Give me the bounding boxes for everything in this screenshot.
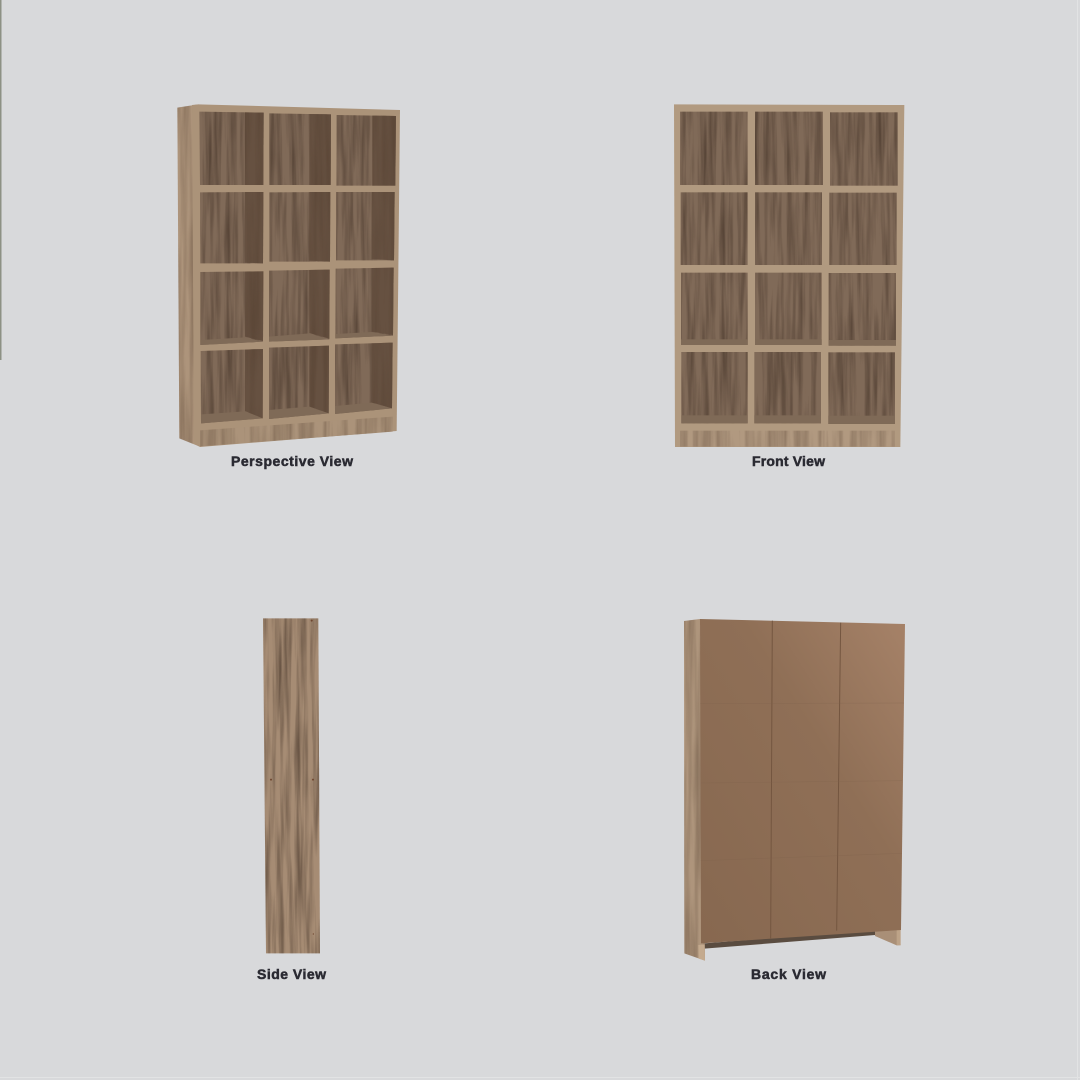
back view bookcase [684,619,905,961]
front frame [192,104,400,447]
cubby walls [199,112,396,423]
front view bookcase [674,104,904,447]
screw holes [270,620,314,935]
left edge strip [0,0,2,360]
cubby inner side walls [245,112,396,418]
side view label: Side View [257,966,326,982]
cubby walls [680,112,898,424]
outer frame [674,104,904,447]
back view label: Back View [751,966,826,982]
bottom edge line [0,1077,1080,1078]
panel grooves [771,621,841,938]
plinth [200,417,393,446]
cubby shelf floors [681,339,896,424]
front view label: Front View [752,453,825,469]
back board [700,619,905,943]
outer side panel [177,104,201,447]
cubby shelf floors [200,332,393,423]
plinth [680,431,895,447]
faint shelf lines [700,703,904,861]
right foot [875,928,901,945]
perspective view bookcase [177,104,400,447]
side view panel [263,618,320,953]
side panel [684,619,705,961]
perspective view label: Perspective View [231,453,353,469]
right edge line [1077,0,1078,1080]
shadow gap [704,930,875,949]
side board [263,618,320,953]
